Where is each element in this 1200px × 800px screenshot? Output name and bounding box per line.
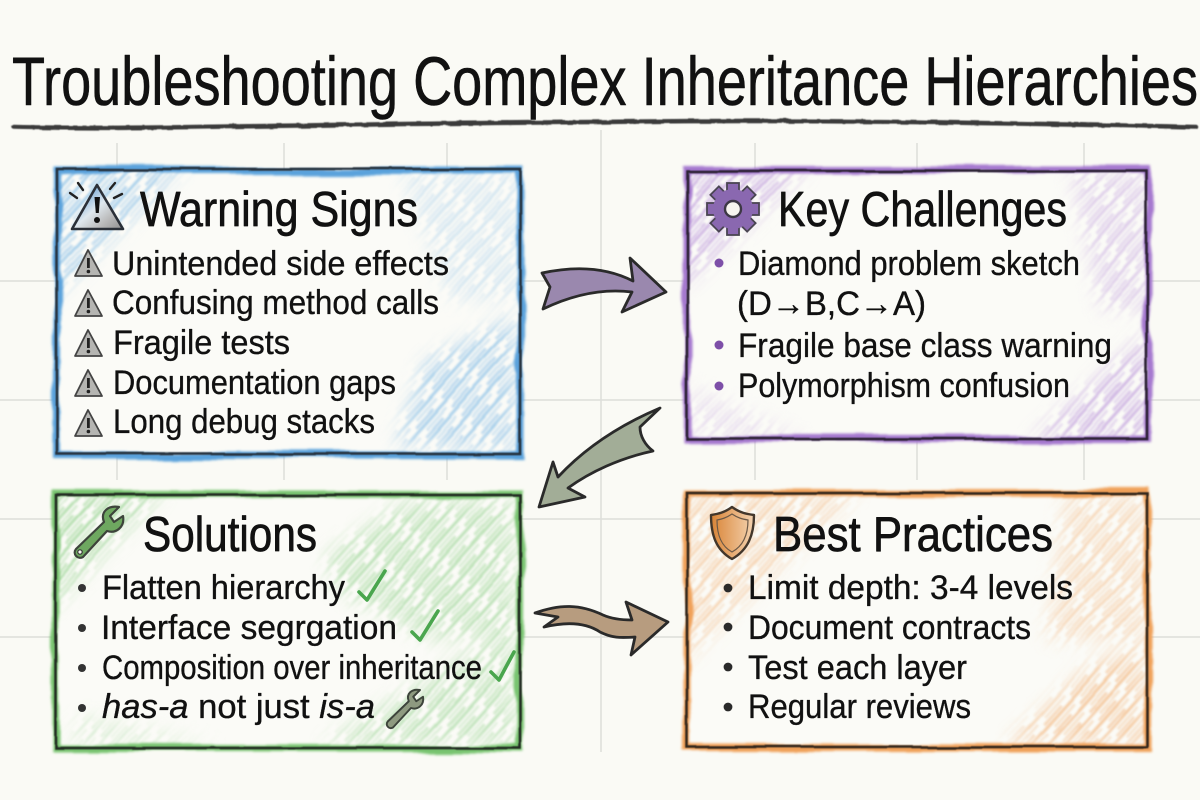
panel: best practices: [687, 493, 1148, 748]
list: warning signs: Long debug stacks: [113, 403, 375, 441]
icon: gear: [707, 183, 759, 235]
icon: wrench: [75, 507, 123, 558]
panel: warning signs: [57, 169, 520, 455]
arrow: solutions to best practices: [535, 602, 668, 655]
list: solutions: Flatten hierarchy: [102, 569, 345, 607]
list: warning signs: [75, 245, 449, 441]
list: solutions: [78, 569, 514, 728]
icon: shield: [711, 507, 754, 559]
heading: key challenges: Key Challenges: [778, 183, 1067, 237]
list: warning signs: Documentation gaps: [113, 364, 396, 402]
list: solutions: has-a not just is-a: [102, 688, 375, 726]
heading: best practices: Best Practices: [773, 508, 1053, 562]
list: warning signs: Confusing method calls: [112, 284, 439, 322]
icon: large warning triangle: [70, 183, 123, 229]
list: key challenges: (D→B,C→A): [737, 285, 926, 323]
panel: key challenges: [687, 170, 1148, 439]
arrow: warning signs to key challenges: [542, 258, 666, 312]
panel: solutions: [56, 494, 520, 748]
list: key challenges: Diamond problem sketch: [738, 245, 1080, 283]
list: best practices: Limit depth: 3-4 levels: [748, 569, 1073, 607]
title underline: [14, 121, 1196, 128]
list: key challenges: [714, 245, 1112, 405]
list: best practices: Document contracts: [748, 609, 1031, 647]
heading: solutions: Solutions: [143, 508, 317, 562]
list: solutions: Composition over inheritance: [102, 649, 482, 687]
list: solutions: Interface segrgation: [101, 609, 397, 647]
list: best practices: Test each layer: [748, 649, 967, 687]
heading: warning signs: Warning Signs: [140, 183, 418, 237]
list: best practices: Regular reviews: [748, 688, 971, 726]
list: warning signs: Fragile tests: [113, 324, 290, 362]
list: key challenges: Polymorphism confusion: [738, 367, 1070, 405]
list: key challenges: Fragile base class warning: [738, 327, 1112, 365]
list: warning signs: Unintended side effects: [112, 245, 449, 283]
arrow: key challenges to solutions: [539, 408, 660, 507]
list: best practices: [724, 569, 1073, 726]
